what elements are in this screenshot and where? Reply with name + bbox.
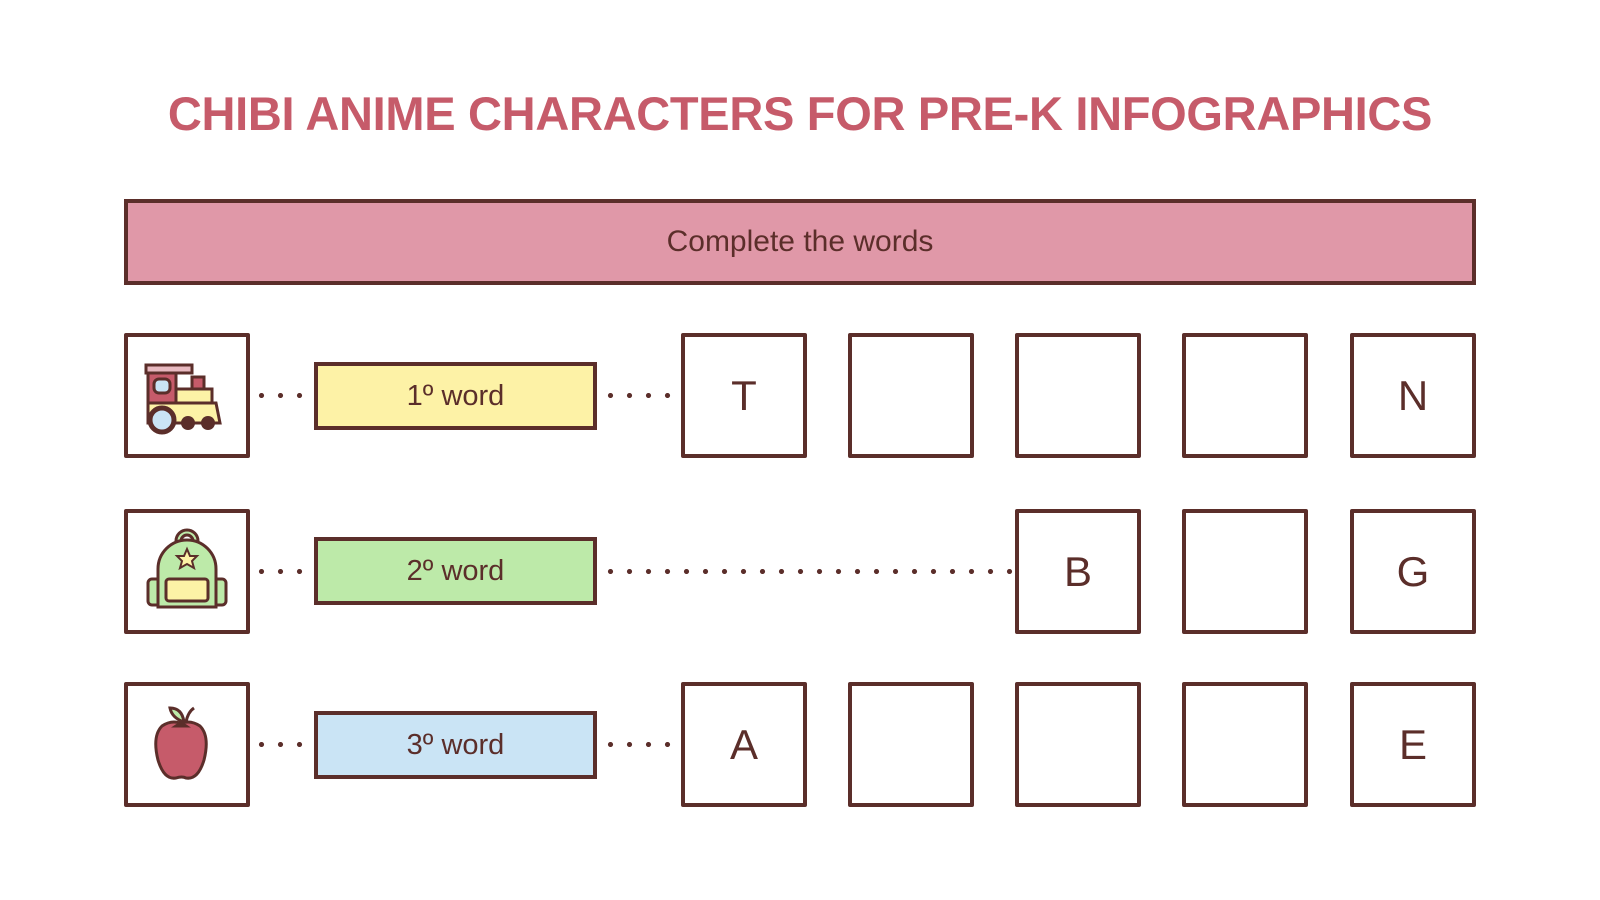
- letter boxes: [681, 682, 1476, 807]
- icon: backpack: [124, 509, 250, 634]
- letter boxes: B: [1064, 548, 1092, 594]
- icon: apple: [124, 682, 250, 807]
- label: 1st word: 1º word: [407, 380, 504, 412]
- letter boxes: [1015, 509, 1476, 634]
- row 3: [124, 682, 1476, 807]
- label: 2nd word: 2º word: [407, 554, 504, 586]
- icon: train: [124, 333, 250, 458]
- letter boxes: E: [1399, 720, 1427, 768]
- label: 1st word: [314, 362, 597, 430]
- letter boxes: A: [730, 720, 758, 768]
- letter boxes: G: [1397, 548, 1429, 594]
- banner: complete the words: [124, 199, 1476, 285]
- row 1: [124, 333, 1476, 458]
- label: 3rd word: [314, 711, 597, 779]
- row 2: [124, 509, 1476, 634]
- letter boxes: N: [1398, 372, 1428, 418]
- label: 2nd word: [314, 537, 597, 605]
- banner: complete the words: Complete the words: [667, 225, 933, 258]
- letter boxes: [681, 333, 1476, 458]
- letter boxes: T: [731, 372, 757, 418]
- title: CHIBI ANIME CHARACTERS FOR PRE-K INFOGRAPHICS: [168, 87, 1432, 140]
- label: 3rd word: 3º word: [407, 728, 504, 760]
